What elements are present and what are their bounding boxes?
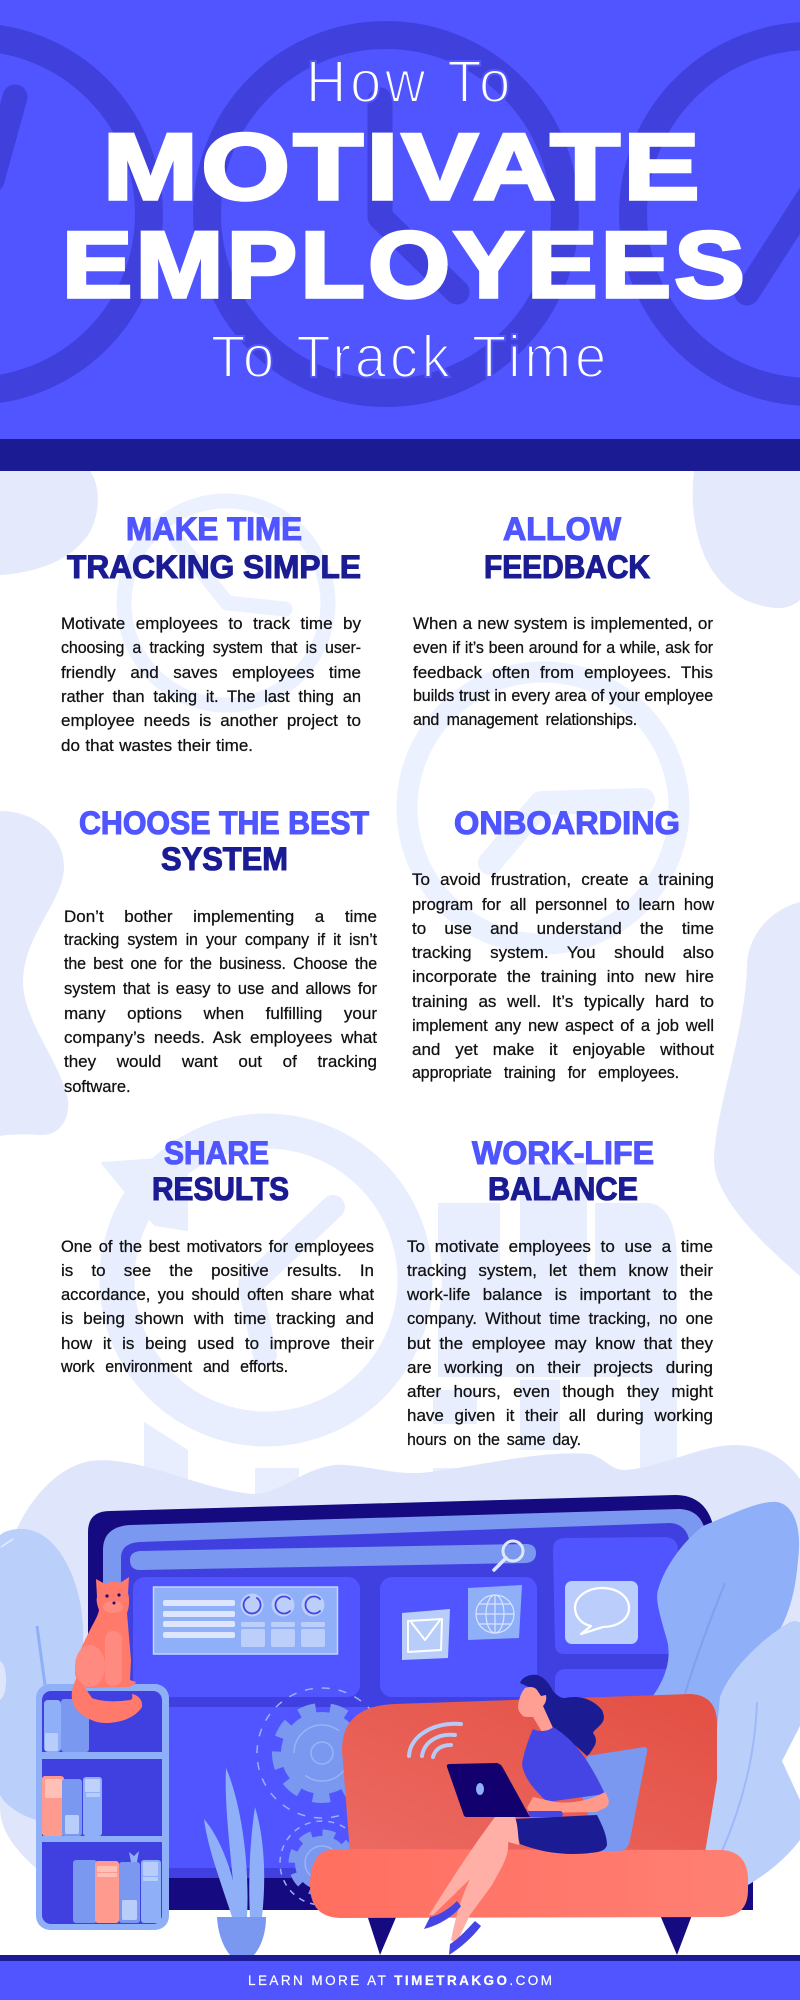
heading: work-life balance: BALANCE (488, 1171, 638, 1207)
panel: work-life balance: To motivate employees to use a time (407, 1237, 713, 1256)
icon: large gear (257, 1688, 387, 1818)
heading: choose the best system: SYSTEM (161, 841, 288, 877)
panel: choose the best system: the best one for the business. Choose the (64, 955, 377, 973)
background clock icons (102, 501, 679, 1429)
panel: onboarding (412, 805, 714, 1082)
illustration: pale backdrop blob (0, 1445, 800, 1880)
icon: globe card (468, 1585, 522, 1640)
panel: make time tracking simple (61, 511, 362, 755)
panel: onboarding: and yet make it enjoyable without (412, 1040, 714, 1059)
panel: work-life balance: but the employee may know that they (407, 1334, 713, 1353)
panel: share results: One of the best motivators for employees (61, 1238, 374, 1256)
heading: onboarding: ONBOARDING (454, 805, 680, 841)
panel: work-life balance (406, 1135, 714, 1449)
icon: cat (72, 1577, 142, 1723)
pillow (580, 1747, 647, 1851)
panel: choose the best system: Don’t bother implementing a time (64, 907, 377, 926)
hair (520, 1675, 604, 1756)
heading: choose the best system: CHOOSE THE BEST (79, 805, 369, 841)
dashboard card (154, 1587, 338, 1654)
title: How To (306, 49, 514, 115)
face and neck (518, 1687, 553, 1732)
panel: onboarding: appropriate training for employees. (412, 1064, 679, 1082)
panel: choose the best system: they would want out of tracking (64, 1052, 377, 1071)
panel: choose the best system (64, 805, 378, 1096)
title: EMPLOYEES (62, 212, 748, 317)
illustration: woman with laptop (424, 1675, 647, 1955)
legs (429, 1817, 519, 1944)
panel: make time tracking simple: choosing a tracking system that is user- (61, 639, 361, 657)
heading: allow feedback (484, 511, 651, 585)
heading: choose the best system (79, 805, 370, 877)
panel: allow feedback (412, 511, 713, 729)
icon: right leaves (650, 1502, 800, 1885)
title (62, 49, 748, 390)
panel: onboarding: training as well. It’s typically hard to (412, 992, 714, 1011)
panel: allow feedback: even if it’s been around for a while, ask for (413, 639, 713, 657)
icon: potted plant (204, 1768, 266, 1955)
text block: onboarding (412, 870, 714, 1082)
panel: onboarding: To avoid frustration, create a training (412, 870, 714, 889)
text block: allow feedback (412, 614, 713, 729)
panel: make time tracking simple: friendly and saves employees time (61, 663, 361, 682)
panel: onboarding: to use and understand the time (412, 919, 714, 938)
icon: wifi signal (409, 1724, 461, 1757)
panel: work-life balance: after hours, even though they might (407, 1382, 713, 1401)
panel: onboarding: program for all personnel to learn how (412, 896, 714, 914)
panel: work-life balance: tracking system, let them know their (407, 1261, 713, 1280)
panel: share results: how it is being used to improve their (61, 1334, 374, 1353)
panel: onboarding: implement any new aspect of a job well (412, 1017, 714, 1035)
panel: share results: work environment and efforts. (61, 1358, 288, 1376)
panel: work-life balance: have given it their all during working (407, 1406, 713, 1425)
heading: make time tracking simple (66, 511, 361, 585)
footer: LEARN MORE AT TIMETRAKGO.COM (248, 1973, 552, 1988)
panel: allow feedback: and management relationships. (413, 711, 637, 729)
panel: make time tracking simple: rather than taking it. The last thing an (61, 688, 361, 706)
panel: choose the best system: software. (64, 1078, 130, 1096)
icon: header clocks (0, 35, 800, 393)
panel: make time tracking simple: employee needs is another project to (61, 711, 361, 730)
panel: make time tracking simple: do that wastes their time. (61, 736, 253, 755)
illustration: monitor (88, 1495, 753, 1910)
panel: allow feedback: When a new system is implemented, or (413, 614, 713, 633)
panel: work-life balance: work-life balance is important to the (407, 1285, 713, 1304)
background calendar icon (90, 1104, 677, 1508)
panel: share results: is to see the positive results. In (61, 1261, 374, 1280)
panel: work-life balance: are working on their projects during (407, 1358, 713, 1377)
icon: chat card (565, 1581, 638, 1644)
text block: make time tracking simple (61, 614, 362, 755)
panel: work-life balance: hours on the same day. (407, 1431, 581, 1449)
panel: share results: accordance, you should often share what (61, 1286, 374, 1304)
panel: make time tracking simple: Motivate employees to track time by (61, 614, 361, 633)
panel: choose the best system: tracking system in your company if it isn’t (64, 931, 377, 949)
heading: allow feedback: ALLOW (503, 511, 622, 547)
laptop (447, 1763, 530, 1817)
panel: choose the best system: company’s needs. Ask employees what (64, 1028, 377, 1047)
footer (0, 1955, 800, 2000)
text block: share results (60, 1238, 374, 1376)
illustration: sofa (310, 1694, 748, 1955)
arm (527, 1792, 609, 1813)
panel: work-life balance: company. Without time tracking, no one (407, 1310, 713, 1328)
heading: make time tracking simple: MAKE TIME (126, 511, 302, 547)
panel: onboarding: incorporate the training into new hire (412, 967, 714, 986)
icon: left leaf (0, 1529, 83, 1820)
heading: work-life balance (471, 1135, 654, 1207)
heading: share results: SHARE (164, 1135, 269, 1171)
panel: onboarding: tracking system. You should also (412, 943, 714, 962)
panel: header (0, 0, 800, 471)
shoes (424, 1901, 461, 1929)
heading: allow feedback: FEEDBACK (484, 549, 650, 585)
heading: work-life balance: WORK-LIFE (472, 1135, 654, 1171)
illustration: bookcase (36, 1684, 169, 1930)
books: middle shelf (42, 1776, 102, 1836)
text block: choose the best system (64, 907, 378, 1096)
panel: allow feedback: feedback often from employees. This (413, 663, 713, 682)
panel: choose the best system: system that is easy to use and allows for (64, 980, 377, 998)
panel: choose the best system: many options when fulfilling your (64, 1004, 377, 1023)
books: bottom shelf (73, 1851, 161, 1923)
panel: share results (60, 1135, 374, 1376)
title: MOTIVATE (103, 114, 703, 219)
title: To Track Time (211, 324, 610, 390)
skirt (513, 1815, 607, 1854)
panel: allow feedback: builds trust in every area of your employee (413, 687, 713, 705)
heading: make time tracking simple: TRACKING SIMPLE (67, 549, 361, 585)
text block: work-life balance (406, 1237, 714, 1449)
panel: share results: is being shown with time tracking and (61, 1309, 374, 1328)
screen panels (133, 1537, 695, 1729)
icon: small gear (280, 1821, 364, 1905)
blouse (522, 1727, 605, 1802)
search bar (130, 1541, 536, 1570)
background blobs (0, 471, 800, 1276)
icon: email card (402, 1609, 450, 1660)
heading: share results: RESULTS (152, 1171, 289, 1207)
heading: share results (152, 1135, 289, 1207)
books: top shelf (44, 1699, 89, 1752)
